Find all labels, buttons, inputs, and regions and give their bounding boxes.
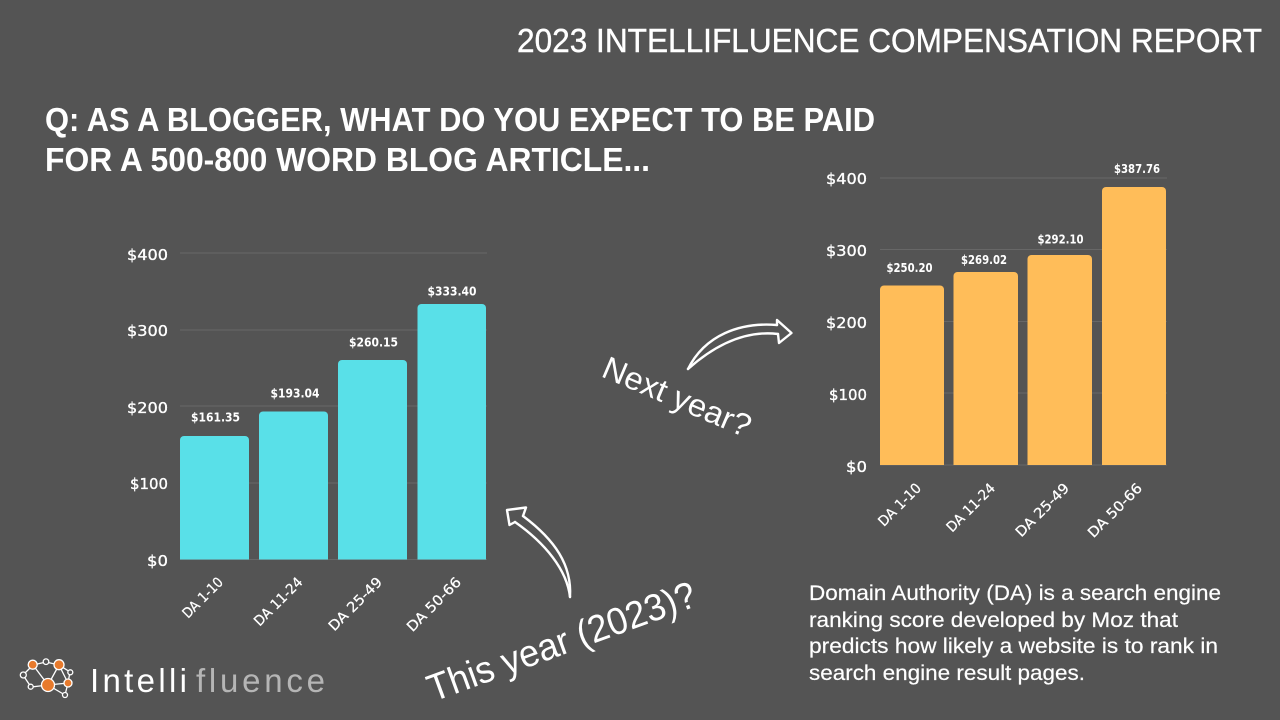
question heading: [45, 101, 875, 178]
definition text block: predicts how likely a website is to rank in: [809, 634, 1218, 658]
definition text block: ranking score developed by Moz that: [809, 608, 1178, 632]
definition text block: [809, 581, 1221, 685]
bar chart: this year 2023: $200: [127, 399, 168, 417]
bar chart: next year: [826, 162, 1167, 541]
bar chart: next year: $200: [826, 314, 867, 332]
title: 2023 INTELLIFLUENCE COMPENSATION REPORT: [517, 22, 1262, 59]
icon: network brain: [20, 659, 73, 698]
bar chart: this year 2023: $161.35: [191, 410, 240, 424]
bar chart: next year: DA 11-24: [944, 480, 999, 536]
bar chart: this year 2023: $400: [127, 246, 168, 264]
arrow: to this year chart: [507, 508, 570, 597]
definition text block: Domain Authority (DA) is a search engine: [809, 581, 1221, 605]
annotation: next year: Next year?: [597, 349, 757, 444]
logo wordmark: fluence: [196, 662, 325, 699]
bar chart: this year 2023: $260.15: [349, 336, 398, 350]
bar chart: this year 2023: $193.04: [270, 386, 320, 400]
bar chart: next year: $292.10: [1038, 232, 1084, 246]
bar chart: next year: $387.76: [1114, 162, 1160, 176]
bar chart: this year 2023: DA 50-66: [404, 574, 465, 635]
bar chart: this year 2023: $100: [130, 475, 168, 493]
bar chart: this year 2023: [127, 246, 487, 635]
bar chart: this year 2023: DA 1-10: [179, 575, 227, 622]
bar chart: next year: $400: [826, 170, 867, 188]
logo wordmark: [90, 662, 325, 699]
bar chart: this year 2023: $300: [127, 322, 168, 340]
definition text block: search engine result pages.: [809, 661, 1085, 685]
bar chart: this year 2023: DA 11-24: [251, 574, 306, 630]
bar chart: next year: $0: [846, 458, 867, 476]
bar chart: next year: DA 1-10: [875, 481, 925, 530]
bar chart: this year 2023: $0: [147, 552, 168, 570]
bar chart: next year: $100: [829, 386, 867, 404]
question heading: FOR A 500-800 WORD BLOG ARTICLE...: [45, 141, 650, 178]
question heading: Q: AS A BLOGGER, WHAT DO YOU EXPECT TO BE PAID: [45, 101, 875, 138]
bar chart: next year: DA 50-66: [1085, 480, 1146, 541]
logo wordmark: Intelli: [90, 662, 187, 699]
annotation: this year: This year (2023)?: [422, 574, 702, 710]
bar chart: next year: $250.20: [886, 261, 932, 275]
logo: [20, 659, 325, 699]
bar chart: this year 2023: DA 25-49: [326, 575, 386, 635]
bar chart: next year: $300: [826, 242, 867, 260]
bar chart: this year 2023: $333.40: [428, 284, 476, 298]
bar chart: next year: DA 25-49: [1013, 481, 1073, 541]
bar chart: next year: $269.02: [961, 253, 1007, 267]
arrow: to next year chart: [688, 320, 792, 369]
